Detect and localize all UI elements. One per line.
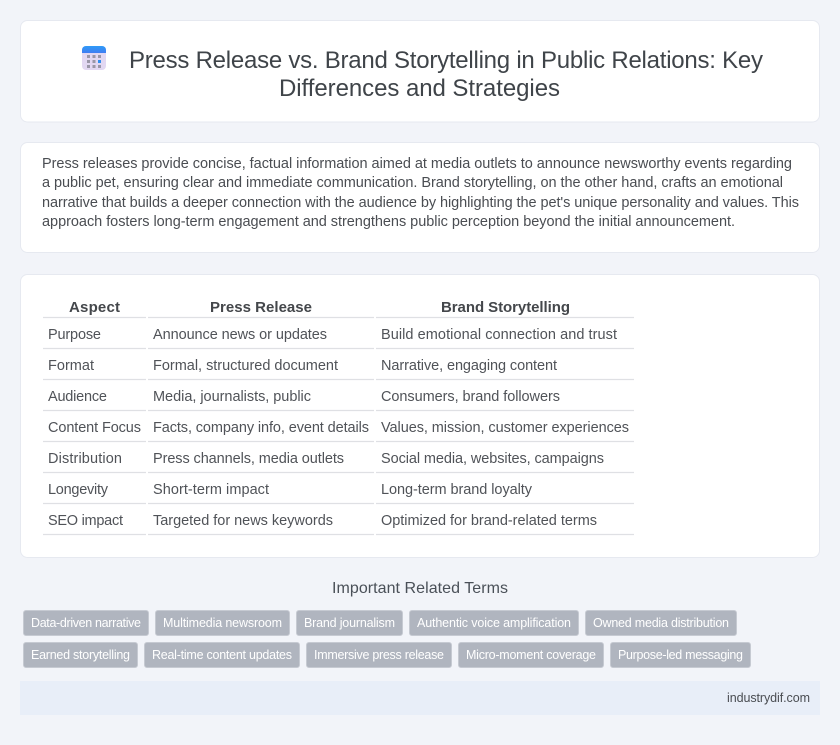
text block: summary: narrative that builds a deeper connection with the audience by highlighting the pet's unique personality and values. This xyxy=(42,195,799,211)
icon: calendar xyxy=(82,46,106,70)
row: distribution xyxy=(48,451,604,467)
tag xyxy=(458,642,604,668)
title: Differences and Strategies xyxy=(279,75,560,102)
tag: Micro-moment coverage xyxy=(466,648,596,662)
tag: Authentic voice amplification xyxy=(417,616,571,630)
tag xyxy=(24,610,148,636)
row: audience: Audience xyxy=(48,389,107,405)
row: purpose: Build emotional connection and trust xyxy=(381,327,617,343)
row: audience: Consumers, brand followers xyxy=(381,389,560,405)
footer source text: industrydif.com xyxy=(727,691,810,705)
row: purpose: Purpose xyxy=(48,327,101,343)
text block: summary: approach fosters long-term engagement and strengthens public perception beyond the initial announcement. xyxy=(42,214,735,230)
tag xyxy=(410,610,578,636)
row: seo impact: Optimized for brand-related terms xyxy=(381,513,597,529)
tag: Immersive press release xyxy=(314,648,444,662)
table header: Brand Storytelling xyxy=(441,299,570,316)
row: seo impact xyxy=(48,513,597,529)
tag xyxy=(144,642,300,668)
row: format: Narrative, engaging content xyxy=(381,358,557,374)
row: format: Formal, structured document xyxy=(153,358,338,374)
tag: Brand journalism xyxy=(304,616,395,630)
row: format xyxy=(48,358,557,374)
tag xyxy=(156,610,290,636)
table header: Aspect xyxy=(69,299,120,316)
row: audience xyxy=(48,389,560,405)
tag: Owned media distribution xyxy=(593,616,729,630)
text block: summary xyxy=(42,156,799,230)
title: Press Release vs. Brand Storytelling in Public Relations: Key xyxy=(129,47,763,74)
tag: Multimedia newsroom xyxy=(163,616,282,630)
row: longevity xyxy=(48,482,533,498)
row: distribution: Social media, websites, campaigns xyxy=(381,451,604,467)
tag xyxy=(610,642,750,668)
tag: Purpose-led messaging xyxy=(618,648,743,662)
tags: related terms xyxy=(24,610,750,668)
tag xyxy=(24,642,138,668)
row: content focus: Facts, company info, event details xyxy=(153,420,369,436)
footer bar xyxy=(20,681,820,715)
panel: title header xyxy=(20,20,820,122)
row: format: Format xyxy=(48,358,94,374)
table header xyxy=(69,299,570,316)
title xyxy=(129,47,763,102)
row: audience: Media, journalists, public xyxy=(153,389,311,405)
tag: Earned storytelling xyxy=(31,648,130,662)
row: distribution: Press channels, media outlets xyxy=(153,451,344,467)
heading: important related terms: Important Related Terms xyxy=(332,580,508,597)
panel: comparison table xyxy=(20,274,820,558)
row: longevity: Short-term impact xyxy=(153,482,269,498)
row: seo impact: SEO impact xyxy=(48,513,123,529)
table header: Press Release xyxy=(210,299,312,316)
row: content focus: Content Focus xyxy=(48,420,141,436)
tag xyxy=(306,642,452,668)
tag: Data-driven narrative xyxy=(31,616,141,630)
row: longevity: Long-term brand loyalty xyxy=(381,482,533,498)
tag xyxy=(586,610,736,636)
row: longevity: Longevity xyxy=(48,482,109,498)
row: content focus: Values, mission, customer experiences xyxy=(381,420,629,436)
row: purpose: Announce news or updates xyxy=(153,327,327,343)
row: content focus xyxy=(48,420,629,436)
tag xyxy=(296,610,402,636)
row: distribution: Distribution xyxy=(48,451,122,467)
panel: summary paragraph xyxy=(20,142,820,252)
text block: summary: a public pet, ensuring clear and immediate communication. Brand storytelling, on the other hand, crafts an emotional xyxy=(42,175,783,191)
row: seo impact: Targeted for news keywords xyxy=(153,513,333,529)
tag: Real-time content updates xyxy=(152,648,292,662)
text block: summary: Press releases provide concise, factual information aimed at media outlets to announce newsworthy events regarding xyxy=(42,156,792,172)
row: purpose xyxy=(48,327,617,343)
